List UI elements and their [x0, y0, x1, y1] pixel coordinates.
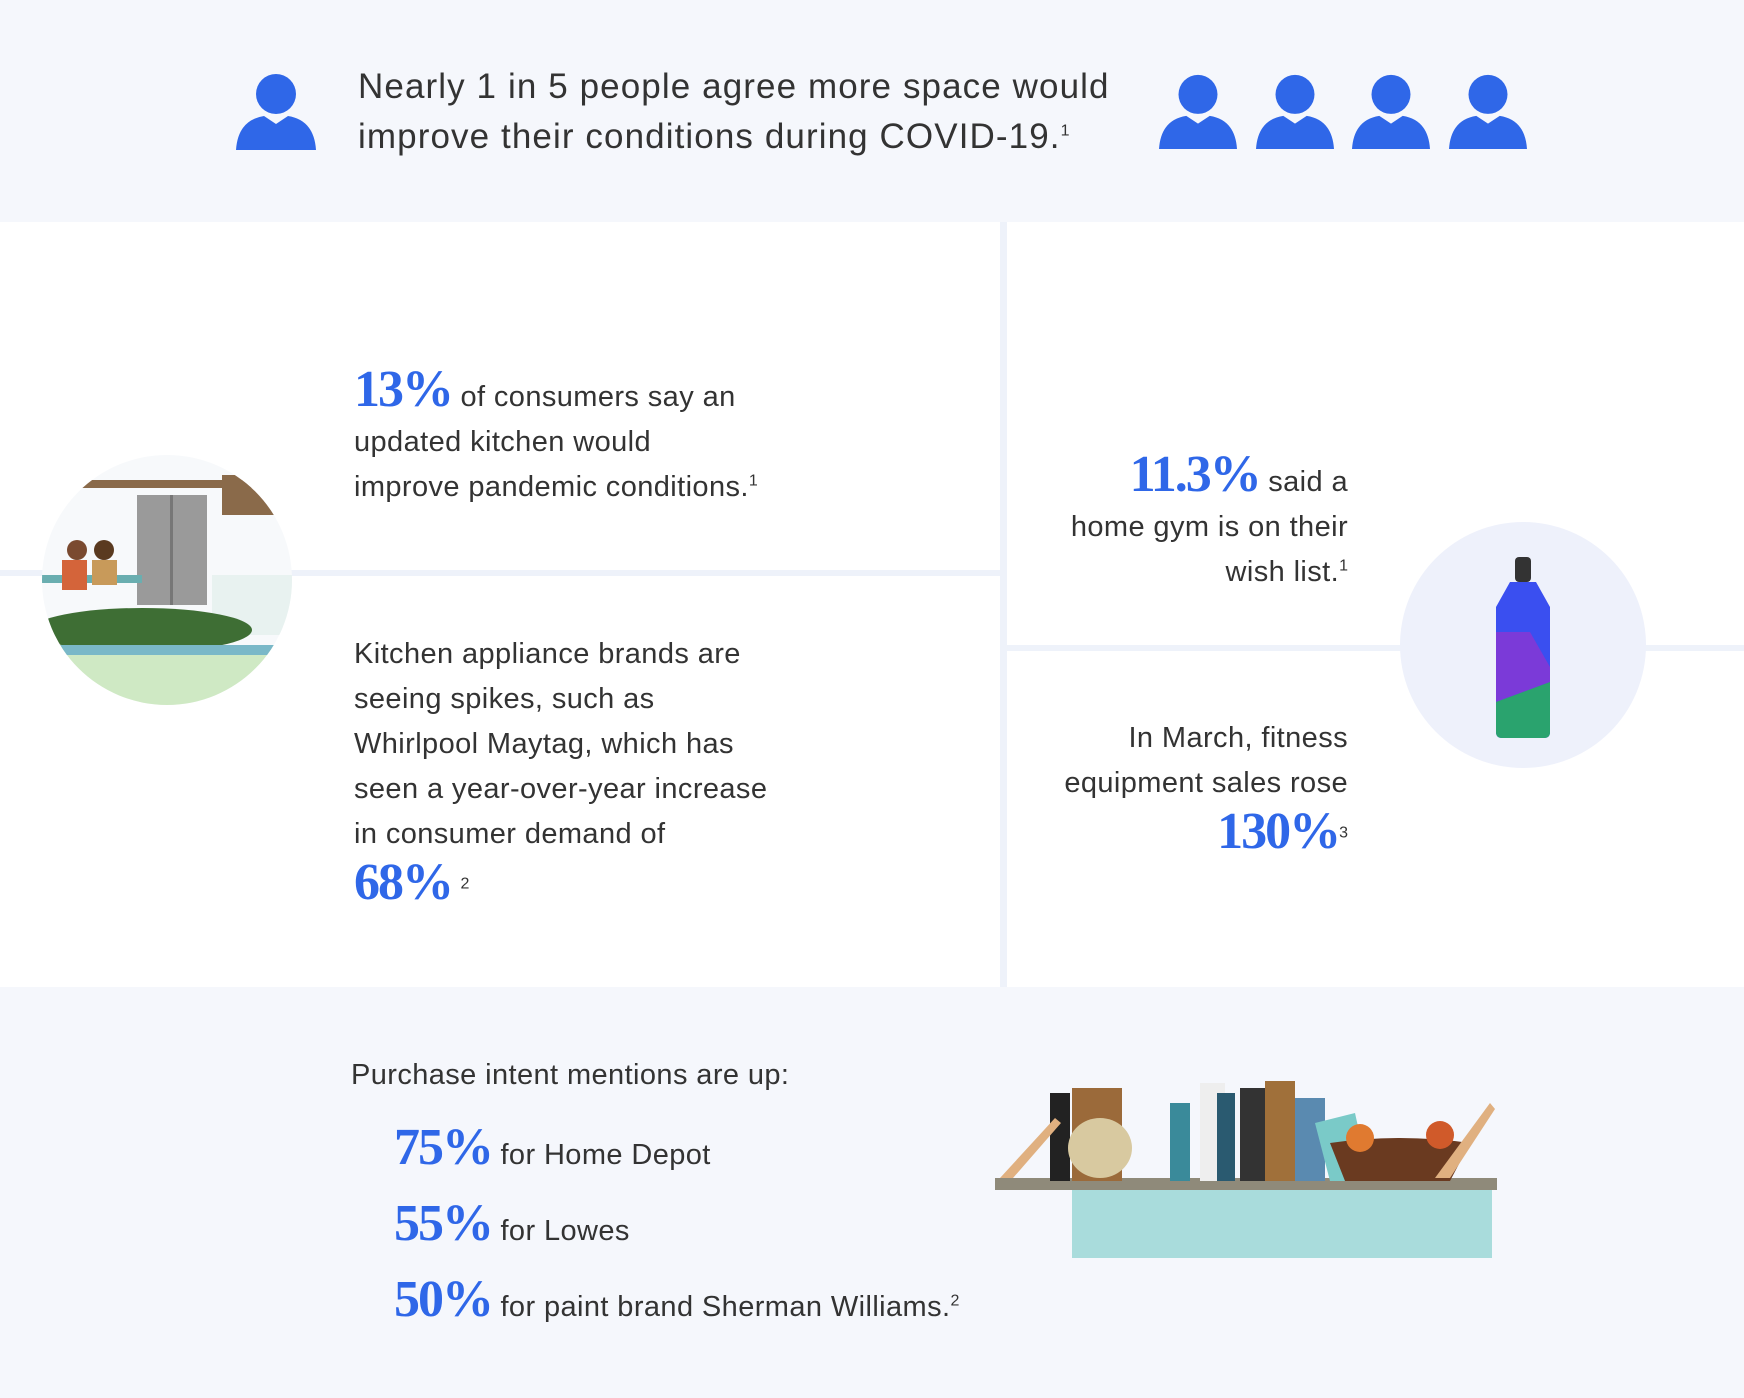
- list: brand stats: 50% for paint brand Sherman Williams.2: [394, 1271, 959, 1328]
- top band: [0, 0, 1744, 222]
- stat: appliance brands 68%: 68% 2: [354, 854, 469, 911]
- list: brand stats: 75% for Home Depot: [394, 1119, 711, 1176]
- stat: 11.3% home gym: home gym is on their: [1071, 511, 1348, 543]
- illustration: bookshelf: [995, 1081, 1497, 1258]
- stat: 11.3% home gym: 11.3% said a: [1130, 446, 1348, 503]
- stat: 11.3% home gym: wish list.1: [1226, 556, 1348, 588]
- illustration: water bottle circle: [1400, 522, 1646, 768]
- icon: person left: [236, 74, 316, 150]
- stat: appliance brands 68%: Kitchen appliance brands are: [354, 638, 741, 670]
- stat: 13% kitchen: [354, 361, 758, 503]
- headline text: Nearly 1 in 5 people agree more space would: [358, 67, 1110, 106]
- list: brand stats: [394, 1119, 959, 1328]
- headline text: improve their conditions during COVID-19.1: [358, 117, 1070, 156]
- illustration: kitchen circle: [42, 475, 292, 705]
- stat: 13% kitchen: updated kitchen would: [354, 426, 651, 458]
- list: brand stats: 55% for Lowes: [394, 1195, 630, 1252]
- stat: 13% kitchen: improve pandemic conditions.1: [354, 471, 758, 503]
- purchase intent text: Purchase intent mentions are up:: [351, 1059, 789, 1091]
- bottom band: [0, 987, 1744, 1398]
- stat: fitness 130%: [1064, 722, 1348, 860]
- stat: appliance brands 68%: seen a year-over-year increase: [354, 773, 767, 805]
- stat: appliance brands 68%: Whirlpool Maytag, which has: [354, 728, 734, 760]
- stat: appliance brands 68%: seeing spikes, such as: [354, 683, 655, 715]
- stat: 11.3% home gym: [1071, 446, 1348, 588]
- stat: appliance brands 68%: in consumer demand of: [354, 818, 665, 850]
- stat: fitness 130%: 130%3: [1217, 803, 1348, 860]
- stat: fitness 130%: equipment sales rose: [1064, 767, 1348, 799]
- stat: appliance brands 68%: [354, 638, 767, 911]
- icons: four persons right: [1159, 74, 1527, 149]
- headline text: [358, 67, 1110, 156]
- stat: fitness 130%: In March, fitness: [1128, 722, 1348, 754]
- stat: 13% kitchen: 13% of consumers say an: [354, 361, 736, 418]
